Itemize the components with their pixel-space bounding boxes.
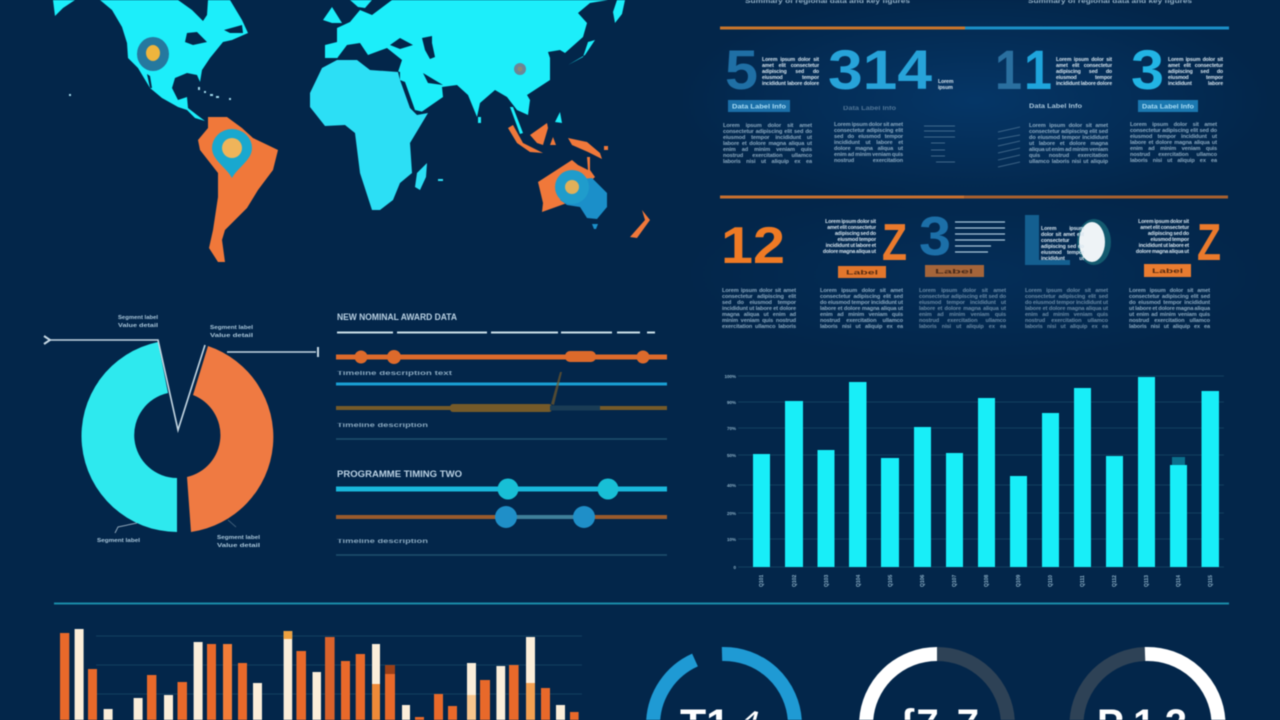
- caption: Timeline description: [337, 539, 429, 545]
- badge: third column: Label: [935, 270, 974, 276]
- x axis labels: Q108: [984, 575, 990, 587]
- icon: bar with white ellipse: [1025, 215, 1111, 265]
- panel: progress gauges: [653, 654, 1218, 720]
- brown and blue timeline: [336, 506, 667, 528]
- panel: orange statistics row: [720, 196, 1228, 330]
- map: South East Asia and New Zealand: [508, 123, 650, 238]
- icon: pin North America: [137, 37, 169, 71]
- donut segment: orange: [187, 346, 273, 532]
- blue timeline: [336, 382, 667, 386]
- icon: pin Asia: [514, 63, 526, 75]
- caption: third column: Data Label Info: [1029, 104, 1082, 110]
- y axis labels: [724, 374, 736, 570]
- badge: fifth column: [1144, 264, 1191, 277]
- badge: second column: Label: [846, 270, 879, 276]
- panel: blue statistics row: [720, 0, 1229, 167]
- x axis labels: Q114: [1176, 575, 1182, 587]
- labels: Segment label: [97, 538, 141, 544]
- x axis labels: Q110: [1048, 575, 1054, 587]
- heading: second timeline: PROGRAMME TIMING TWO: [337, 469, 462, 479]
- number: 314: 314: [828, 38, 932, 101]
- leader lines: [44, 336, 318, 533]
- gauge: 77: [866, 654, 1008, 720]
- y axis labels: 0: [733, 565, 736, 570]
- caption: second column: Data Label Info: [843, 106, 896, 112]
- badge: fourth column: [1138, 100, 1198, 112]
- y axis labels: 40%: [727, 483, 736, 488]
- letter: first Z: Z: [882, 214, 907, 272]
- x axis labels: Q112: [1112, 575, 1118, 587]
- dashed white rule: [337, 332, 655, 334]
- y axis labels: 100%: [724, 374, 736, 379]
- map: North American lakes and bays: [147, 0, 243, 88]
- labels: Segment label: [217, 535, 261, 541]
- x axis labels: Q101: [759, 575, 765, 587]
- panel: donut chart: [44, 315, 318, 549]
- panel: world map: [53, 0, 650, 262]
- x axis labels: Q109: [1016, 575, 1022, 587]
- y axis labels: 50%: [727, 453, 736, 458]
- number: 12: 12: [721, 217, 785, 275]
- icon: pin South America: [212, 129, 252, 178]
- faint rules: [336, 439, 667, 555]
- divider above bottom row: [54, 602, 1229, 604]
- number: 3: 3: [1131, 38, 1164, 101]
- x axis labels: [759, 575, 1214, 587]
- y axis labels: 90%: [727, 400, 736, 405]
- badge: second column: [838, 266, 886, 278]
- labels: [97, 315, 261, 549]
- x axis labels: Q107: [952, 575, 958, 587]
- caption: Timeline description: [337, 423, 429, 429]
- labels: Segment label: [210, 325, 254, 331]
- cyan timeline: [336, 478, 667, 500]
- badge: fourth column: Data Label Info: [1142, 104, 1194, 110]
- x axis labels: Q111: [1080, 575, 1086, 587]
- y axis labels: 10%: [727, 537, 736, 542]
- map: Africa: [310, 60, 443, 210]
- gridlines: [738, 376, 1224, 567]
- x axis labels: Q104: [856, 575, 862, 587]
- x axis labels: Q113: [1144, 575, 1150, 587]
- gridlines: [96, 636, 582, 694]
- donut segment: cyan: [81, 342, 177, 532]
- orange divider: [720, 196, 1228, 198]
- map: South America: [198, 117, 278, 262]
- panel: timelines: [336, 312, 667, 555]
- labels: Value detail: [118, 323, 159, 329]
- number: 11: 1: [995, 38, 1022, 101]
- bar chart: cyan monthly bars: [724, 374, 1224, 587]
- map: Caribbean islands: [69, 87, 231, 100]
- sketch: third column: [998, 127, 1020, 167]
- bar chart: orange and cream bars: [60, 629, 582, 720]
- map: Australia east: [560, 178, 607, 229]
- map: North America: [53, 0, 248, 121]
- icon: pin Australia: [555, 170, 589, 204]
- x axis labels: Q103: [824, 575, 830, 587]
- orange bars: [60, 633, 579, 720]
- heading: first timeline: NEW NOMINAL AWARD DATA: [337, 312, 457, 322]
- badge: first column: Data Label Info: [732, 104, 786, 110]
- map: Australia west: [538, 157, 595, 212]
- bar highlight stub: [1172, 457, 1185, 465]
- x axis labels: Q106: [920, 575, 926, 587]
- brown timeline: [336, 372, 667, 412]
- badge: fifth column: Label: [1152, 269, 1184, 275]
- orange timeline: [336, 350, 667, 364]
- bar colour accents: [284, 631, 535, 720]
- caption: Timeline description text: [337, 371, 452, 377]
- y axis labels: 20%: [727, 511, 736, 516]
- orange and blue divider: [720, 26, 1229, 30]
- badge: third column: [925, 265, 984, 277]
- number: 11: [995, 38, 1052, 101]
- gauge: P12: [1076, 654, 1218, 720]
- x axis labels: Q105: [888, 575, 894, 587]
- bars: [753, 377, 1219, 567]
- cream bars: [75, 629, 565, 720]
- map: Eurasia: [323, 0, 625, 134]
- number: 11: 1: [1024, 38, 1052, 101]
- note lines: second column: [924, 126, 955, 162]
- gauge: T1: [653, 654, 795, 720]
- number: 5: 5: [725, 38, 758, 101]
- x axis labels: Q102: [792, 575, 798, 587]
- text lines: beside dark 3: [955, 222, 1005, 252]
- labels: Value detail: [217, 543, 261, 549]
- labels: Segment label: [118, 315, 158, 321]
- x axis labels: Q115: [1208, 575, 1214, 587]
- y axis labels: 70%: [727, 426, 736, 431]
- labels: Value detail: [210, 333, 254, 339]
- header captions: [745, 0, 1193, 5]
- letter: second Z: Z: [1197, 214, 1221, 272]
- badge: first column: [728, 100, 790, 112]
- number: dark 3: 3: [919, 205, 951, 267]
- map: inland seas: [337, 36, 443, 115]
